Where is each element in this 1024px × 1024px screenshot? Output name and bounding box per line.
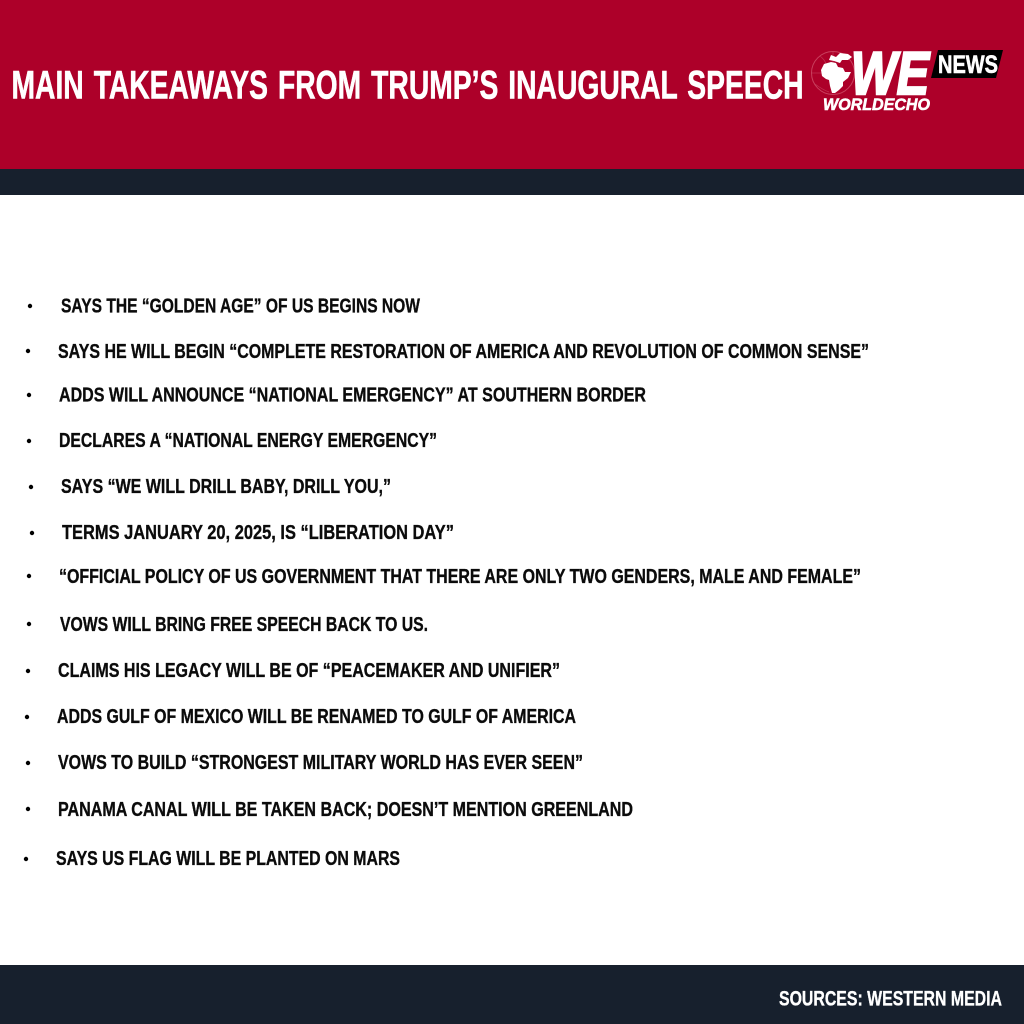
item 13: SAYS US FLAG WILL BE PLANTED ON MARS [56, 847, 400, 870]
item 1: SAYS THE “GOLDEN AGE” OF US BEGINS NOW [61, 294, 420, 318]
item 6: TERMS JANUARY 20, 2025, IS “LIBERATION DAY” [62, 521, 454, 544]
list of takeaways [24, 294, 869, 870]
item 9: CLAIMS HIS LEGACY WILL BE OF “PEACEMAKER AND UNIFIER” [58, 659, 560, 682]
icon: globe [812, 52, 854, 94]
item 3: ADDS WILL ANNOUNCE “NATIONAL EMERGENCY” AT SOUTHERN BORDER [59, 384, 646, 406]
item 4: DECLARES A “NATIONAL ENERGY EMERGENCY” [59, 429, 437, 452]
item 5: SAYS “WE WILL DRILL BABY, DRILL YOU,” [61, 475, 391, 498]
logo: WorldEcho News [812, 40, 1003, 114]
item 11: VOWS TO BUILD “STRONGEST MILITARY WORLD HAS EVER SEEN” [58, 751, 583, 774]
item 10: ADDS GULF OF MEXICO WILL BE RENAMED TO GULF OF AMERICA [57, 705, 576, 728]
item 8: VOWS WILL BRING FREE SPEECH BACK TO US. [60, 613, 428, 636]
footer bar [0, 965, 1024, 1024]
header banner [0, 0, 1024, 195]
logo NEWS badge: NEWS [938, 51, 998, 79]
logo letters WE: WE [851, 40, 931, 107]
item 12: PANAMA CANAL WILL BE TAKEN BACK; DOESN’T MENTION GREENLAND [58, 798, 633, 821]
logo wordmark: WORLDECHO [823, 96, 930, 114]
